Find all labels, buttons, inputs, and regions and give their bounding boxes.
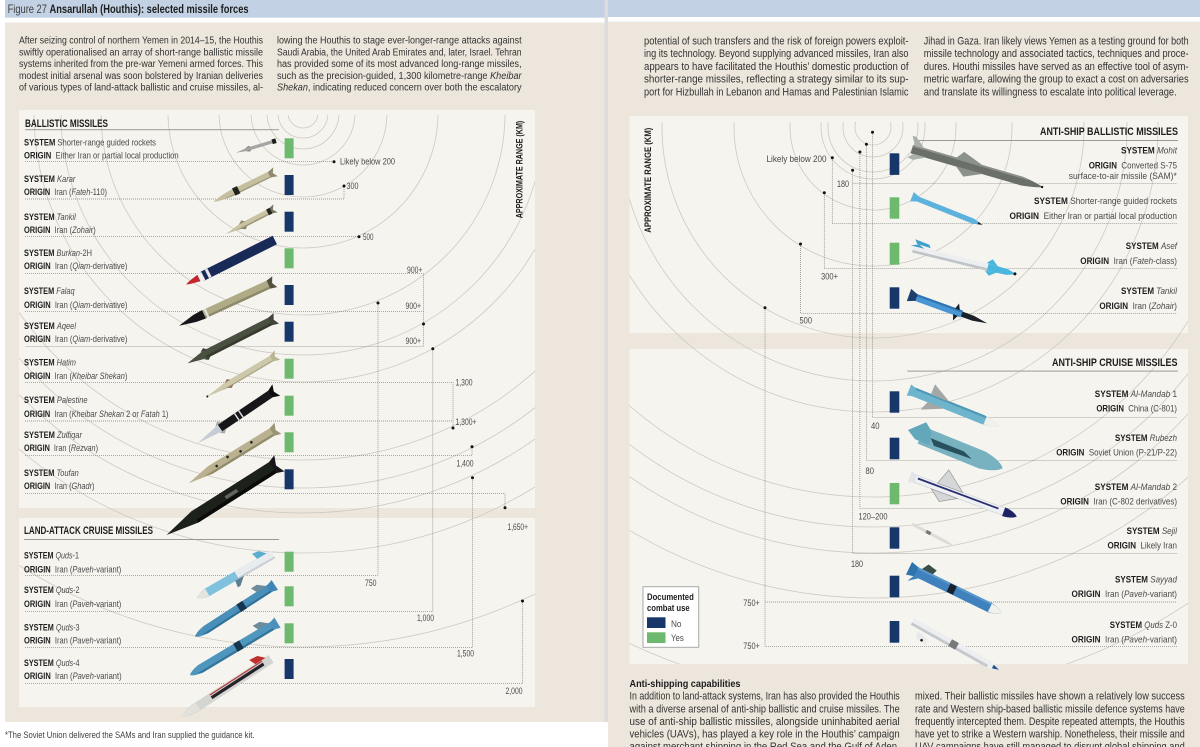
row labels: ballistic missiles: SYSTEM Palestine	[24, 395, 88, 405]
range values: right chart: 180	[851, 559, 863, 569]
missile: Quds Z-0	[906, 618, 1001, 682]
row labels: anti-ship ballistic missiles: SYSTEM Asef	[1126, 241, 1178, 251]
range values: left chart: 900+	[406, 336, 421, 346]
range values: left chart: 1,400	[456, 458, 474, 468]
text block: left intro column 2: Shekan, indicating reduced concern over both the escalatory	[277, 82, 522, 94]
row labels: land-attack cruise missiles: ORIGIN Iran (Paveh-variant)	[24, 636, 121, 646]
row labels: anti-ship cruise missiles: SYSTEM Al-Mandab 1	[1095, 389, 1177, 399]
left page header bar	[5, 0, 604, 18]
range values: left chart: 750	[365, 578, 376, 588]
range values: right chart: 40	[871, 421, 880, 431]
axis label: approximate range right: APPROXIMATE RANGE (KM)	[642, 128, 653, 233]
missile: Quds-3	[185, 614, 281, 680]
row labels: anti-ship ballistic missiles: ORIGIN Converted S-75	[1089, 160, 1177, 170]
range values: left chart: 1,000	[417, 613, 434, 623]
missile: Tankil	[224, 204, 278, 238]
row labels: ballistic missiles: SYSTEM Karar	[24, 174, 76, 184]
range values: right chart	[743, 154, 888, 651]
row labels: land-attack cruise missiles: SYSTEM Quds-4	[24, 658, 80, 668]
row labels: ballistic missiles: SYSTEM Falaq	[24, 286, 75, 296]
missile: Al-Mandab 2	[905, 458, 1024, 529]
missile: shorter-range rocket	[235, 138, 277, 156]
row labels: anti-ship ballistic missiles: ORIGIN Iran (Zohair)	[1099, 301, 1177, 311]
missile: Rubezh	[905, 417, 1008, 477]
row labels: ballistic missiles: ORIGIN Iran (Kheibar Shekan 2 or Fatah 1)	[24, 409, 168, 419]
range values: right chart: 500	[800, 316, 812, 326]
range values: left chart: 300	[346, 181, 358, 191]
legend: documented combat use: combat use	[647, 603, 690, 613]
page gutter	[604, 0, 608, 722]
text block: right intro column 1: potential of such transfers and the risk of foreign powers exploit-	[644, 36, 909, 48]
row labels: anti-ship ballistic missiles: ORIGIN Iran (Fateh-class)	[1080, 256, 1177, 266]
row labels: ballistic missiles: ORIGIN Iran (Qiam-derivative)	[24, 300, 127, 310]
text block: anti-shipping column 1: In addition to land-attack systems, Iran has also provided the Houthis	[630, 691, 900, 703]
text block: left intro column 2: has provided some of its most advanced long-range missiles,	[277, 59, 522, 70]
row labels: land-attack cruise missiles: SYSTEM Quds-2	[24, 585, 80, 595]
row labels: anti-ship cruise missiles: ORIGIN Soviet Union (P-21/P-22)	[1056, 448, 1177, 458]
range values: right chart: Likely below 200	[766, 154, 826, 164]
panel: anti-ship ballistic missiles background	[630, 116, 1188, 333]
heading: ballistic missiles: BALLISTIC MISSILES	[25, 118, 108, 130]
row labels: ballistic missiles: ORIGIN Iran (Rezvan)	[24, 443, 98, 453]
row labels: land-attack cruise missiles: SYSTEM Quds-3	[24, 622, 80, 632]
row labels: anti-ship cruise missiles: SYSTEM Sejil	[1127, 526, 1178, 536]
row labels: anti-ship cruise missiles: ORIGIN Iran (Paveh-variant)	[1072, 634, 1177, 644]
range values: left chart: 900+	[407, 265, 422, 275]
range values: right chart: 750+	[743, 598, 760, 608]
range values: left chart: 1,500	[457, 648, 474, 658]
text block: left intro column 1: modest initial arsenal was soon bolstered by Iranian deliveries	[19, 71, 263, 82]
missile: Sayyad	[904, 558, 1007, 624]
row labels: ballistic missiles: SYSTEM Aqeel	[24, 321, 77, 331]
range values: left chart: 1,300+	[456, 417, 476, 427]
row labels: ballistic missiles: SYSTEM Shorter-range guided rockets	[24, 137, 156, 147]
text block: left intro column 2: such as the precision-guided, 1,300 kilometre-range Kheibar	[277, 71, 522, 82]
row labels: anti-ship ballistic missiles: SYSTEM Tankil	[1121, 286, 1178, 296]
row labels: anti-ship ballistic missiles: ORIGIN Either Iran or partial local production	[1010, 211, 1177, 221]
row labels: anti-ship cruise missiles: ORIGIN Likely Iran	[1108, 540, 1177, 550]
bars: combat use right chart	[890, 153, 899, 643]
legend: documented combat use	[643, 587, 699, 647]
missile: Hatim	[203, 350, 280, 402]
range values: right chart: 300+	[821, 272, 838, 282]
text block: anti-shipping column 2	[915, 691, 1185, 747]
row labels: anti-ship ballistic missiles: surface-to-air missile (SAM)*	[1069, 171, 1177, 181]
row labels: land-attack cruise missiles: ORIGIN Iran (Paveh-variant)	[24, 564, 121, 574]
range arcs: left chart	[19, 115, 535, 648]
axis label: approximate range left: APPROXIMATE RANGE (KM)	[513, 121, 524, 218]
text block: left intro column 2: Saudi Arabia, the United Arab Emirates and, later, Israel. Tehran	[277, 47, 522, 58]
text block: anti-shipping column 1	[629, 691, 900, 747]
text block: left intro column 2	[277, 36, 522, 94]
text block: anti-shipping column 1: use of anti-ship ballistic missiles, alongside uninhabited aerial	[630, 716, 900, 728]
row labels: anti-ship ballistic missiles: SYSTEM Mohit	[1121, 146, 1177, 156]
row labels: ballistic missiles: SYSTEM Hatim	[24, 358, 76, 368]
row labels: ballistic missiles: ORIGIN Iran (Kheibar Shekan)	[24, 371, 127, 381]
missile: Palestine	[194, 384, 280, 449]
missile: Quds-1	[191, 545, 279, 608]
range arcs: right chart	[630, 122, 1188, 664]
text block: anti-shipping column 1: with a diverse arsenal of anti-ship ballistic and cruise missiles. The	[629, 703, 900, 715]
heading: land-attack cruise missiles: LAND-ATTACK CRUISE MISSILES	[24, 525, 153, 537]
missile: Aqeel	[185, 313, 279, 369]
row labels: anti-ship cruise missiles: ORIGIN Iran (C-802 derivatives)	[1060, 496, 1177, 506]
range values: left chart: 1,300	[456, 378, 472, 388]
missile: Karar	[211, 167, 278, 206]
row labels: ballistic missiles: ORIGIN Either Iran or partial local production	[24, 150, 179, 160]
row labels: land-attack cruise missiles: ORIGIN Iran (Paveh-variant)	[24, 599, 121, 609]
range leader lines: right chart	[764, 131, 1177, 647]
row labels: anti-ship cruise missiles: SYSTEM Quds Z-0	[1110, 620, 1177, 630]
row labels: ballistic missiles: ORIGIN Iran (Ghadr)	[24, 481, 94, 491]
text block: right intro column 1: ing its technology. Beyond supplying advanced missiles, Iran also	[644, 48, 909, 60]
row labels: ballistic missiles: ORIGIN Iran (Fateh-110)	[24, 187, 107, 197]
row labels: ballistic missiles: SYSTEM Toufan	[24, 468, 79, 478]
right page header bar	[608, 0, 1200, 17]
missile: Quds-4	[176, 650, 274, 721]
right page background	[608, 22, 1200, 747]
text block: right intro column 1: appears to have facilitated the Houthis’ domestic production of	[644, 61, 909, 73]
text block: left intro column 2: lowing the Houthis to stage ever-longer-range attacks against	[277, 36, 522, 46]
row labels: anti-ship cruise missiles: ORIGIN China (C-801)	[1096, 404, 1177, 414]
text block: left intro column 1: After seizing control of northern Yemen in 2014–15, the Houthis	[19, 36, 263, 46]
row labels: land-attack cruise missiles	[24, 550, 122, 681]
row labels: anti-ship cruise missiles: SYSTEM Sayyad	[1115, 574, 1178, 584]
legend: documented combat use: Yes	[671, 633, 684, 643]
title: Figure 27 Ansarullah (Houthis): selected missile forces	[8, 3, 249, 16]
missile: Falaq	[177, 276, 277, 331]
text block: left intro column 1: of various types of land-attack ballistic and cruise missiles, al-	[19, 82, 263, 94]
range values: right chart: 750+	[743, 641, 760, 651]
missile: Sejil	[911, 522, 955, 547]
row labels: anti-ship cruise missiles: SYSTEM Al-Mandab 2	[1095, 482, 1177, 492]
row labels: anti-ship cruise missiles	[1056, 389, 1178, 644]
row labels: ballistic missiles: ORIGIN Iran (Qiam-derivative)	[24, 261, 127, 271]
legend: documented combat use: Documented	[647, 592, 694, 602]
text block: right intro column 1: port for Hizbullah in Lebanon and Hamas and Palestinian Islamic	[644, 86, 909, 98]
missile: Burkan-2H	[184, 236, 277, 289]
missile: Asef	[908, 239, 1019, 282]
missile: Mohit	[906, 136, 1047, 199]
missile: shorter-range guided rocket blue	[910, 192, 984, 230]
text block: right intro column 1: shorter-range missiles, reflecting a strategy similar to its sup-	[644, 74, 909, 86]
left page background	[5, 22, 604, 722]
row labels: anti-ship cruise missiles: SYSTEM Rubezh	[1115, 433, 1177, 443]
row labels: anti-ship ballistic missiles	[1010, 146, 1178, 311]
text block: left intro column 1: systems inherited from the pre-war Yemeni armed forces. This	[19, 59, 263, 70]
missile: Zulfiqar	[185, 423, 281, 489]
panel: ballistic missiles background	[19, 110, 535, 508]
range values: left chart: Likely below 200	[340, 156, 395, 166]
row labels: land-attack cruise missiles: ORIGIN Iran (Paveh-variant)	[24, 671, 122, 681]
range values: left chart	[340, 156, 528, 696]
text block: left intro column 1	[19, 36, 263, 94]
row labels: land-attack cruise missiles: SYSTEM Quds-1	[24, 550, 79, 560]
panel: anti-ship cruise missiles background	[630, 349, 1188, 664]
text block: right intro column 1	[644, 36, 909, 98]
range values: left chart: 900+	[406, 301, 421, 311]
text block: left intro column 1: swiftly operationalised an array of short-range ballistic missile	[19, 47, 263, 58]
row labels: anti-ship ballistic missiles: SYSTEM Shorter-range guided rockets	[1034, 196, 1177, 206]
row labels: ballistic missiles: SYSTEM Zulfiqar	[24, 430, 83, 440]
missile: Quds-2	[190, 577, 278, 642]
missile: Toufan	[161, 455, 284, 543]
missile: Al-Mandab 1	[904, 376, 1004, 439]
legend: documented combat use: No	[671, 619, 682, 629]
range values: right chart: 180	[837, 179, 849, 189]
panel: land-attack cruise missiles background	[19, 518, 535, 707]
row labels: ballistic missiles: SYSTEM Tankil	[24, 212, 77, 222]
row labels: ballistic missiles: ORIGIN Iran (Zohair)	[24, 225, 96, 235]
row labels: ballistic missiles	[24, 137, 179, 491]
text block: anti-shipping column 1: vehicles (UAVs), has played a key role in the Houthis’ campaign	[630, 729, 900, 741]
range values: right chart: 120–200	[858, 512, 888, 522]
missile: Tankil blue	[906, 287, 990, 332]
range values: right chart: 80	[866, 466, 874, 476]
bars: combat use left chart	[285, 138, 294, 679]
range values: left chart: 2,000	[506, 686, 522, 696]
text block: right intro column 2	[924, 36, 1189, 98]
range values: left chart: 1,650+	[508, 522, 528, 532]
heading: anti-shipping capabilities: Anti-shipping capabilities	[630, 678, 741, 690]
row labels: ballistic missiles: ORIGIN Iran (Qiam-derivative)	[24, 334, 127, 344]
row labels: anti-ship cruise missiles: ORIGIN Iran (Paveh-variant)	[1072, 589, 1177, 599]
footnote: *The Soviet Union delivered the SAMs and Iran supplied the guidance kit.	[5, 730, 254, 740]
range leader lines: left chart	[25, 160, 524, 684]
row labels: ballistic missiles: SYSTEM Burkan-2H	[24, 248, 92, 258]
range values: left chart: 500	[363, 232, 374, 242]
